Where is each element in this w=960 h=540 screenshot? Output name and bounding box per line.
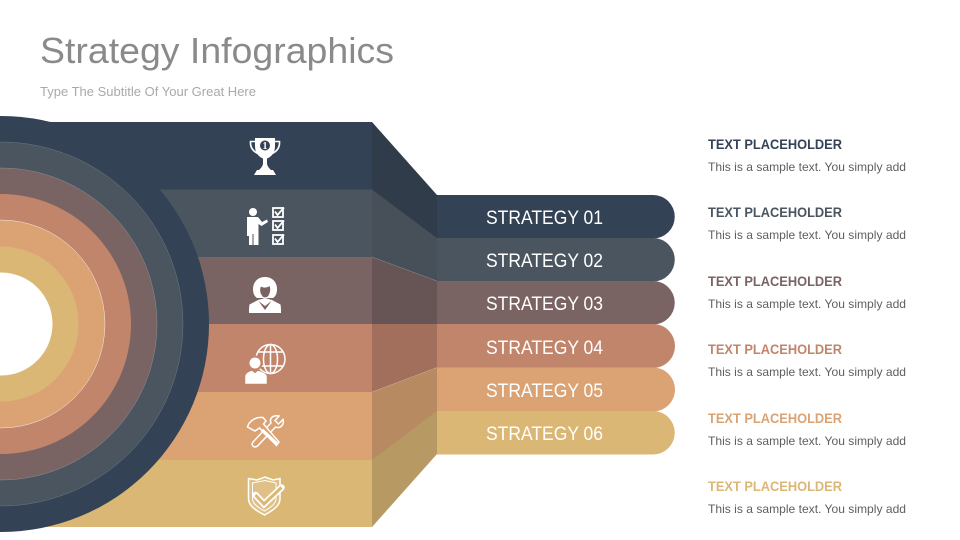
pill: strategy 03: STRATEGY 03 <box>486 294 603 315</box>
pill: strategy 04: STRATEGY 04 <box>486 338 603 359</box>
text block 2: This is a sample text. You simply add <box>708 228 906 242</box>
pill: strategy 02: STRATEGY 02 <box>486 251 603 272</box>
pill: strategy 02 <box>437 238 675 282</box>
icon: woman <box>249 277 281 313</box>
text block 5: This is a sample text. You simply add <box>708 434 906 448</box>
strategy bands <box>0 122 372 527</box>
icon: presenter with checklist <box>247 208 284 245</box>
concentric rings <box>0 116 209 532</box>
pill: strategy 01 <box>437 195 675 238</box>
pill: strategy 05 <box>437 368 675 412</box>
pill: strategy 05: STRATEGY 05 <box>486 381 603 402</box>
text block 2: TEXT PLACEHOLDER <box>708 205 842 220</box>
text block 3: This is a sample text. You simply add <box>708 297 906 311</box>
text block 2 <box>708 205 906 242</box>
subtitle: Type The Subtitle Of Your Great Here <box>40 84 256 99</box>
text block 6: This is a sample text. You simply add <box>708 502 906 516</box>
text block 4: This is a sample text. You simply add <box>708 365 906 379</box>
text block 1 <box>708 137 906 174</box>
pill: strategy 03 <box>437 281 675 324</box>
icon: shield with check <box>248 477 282 515</box>
icon: trophy <box>250 138 280 175</box>
text block 6 <box>708 479 906 516</box>
perspective side connectors <box>372 122 437 527</box>
pills <box>437 195 675 454</box>
text block 1: This is a sample text. You simply add <box>708 160 906 174</box>
text block 4: TEXT PLACEHOLDER <box>708 342 842 357</box>
title: Strategy Infographics <box>40 30 394 71</box>
icon: globe with person <box>245 344 285 384</box>
icon: trophy: 1 <box>262 141 268 152</box>
icon: hammer and wrench <box>248 416 283 447</box>
pill: strategy 06: STRATEGY 06 <box>486 424 603 445</box>
pill: strategy 01: STRATEGY 01 <box>486 208 603 229</box>
text block 3 <box>708 274 906 311</box>
text block 1: TEXT PLACEHOLDER <box>708 137 842 152</box>
text block 5 <box>708 411 906 448</box>
text block 5: TEXT PLACEHOLDER <box>708 411 842 426</box>
pill: strategy 04 <box>437 324 675 368</box>
text block 6: TEXT PLACEHOLDER <box>708 479 842 494</box>
pill: strategy 06 <box>437 411 675 454</box>
text block 3: TEXT PLACEHOLDER <box>708 274 842 289</box>
text block 4 <box>708 342 906 379</box>
